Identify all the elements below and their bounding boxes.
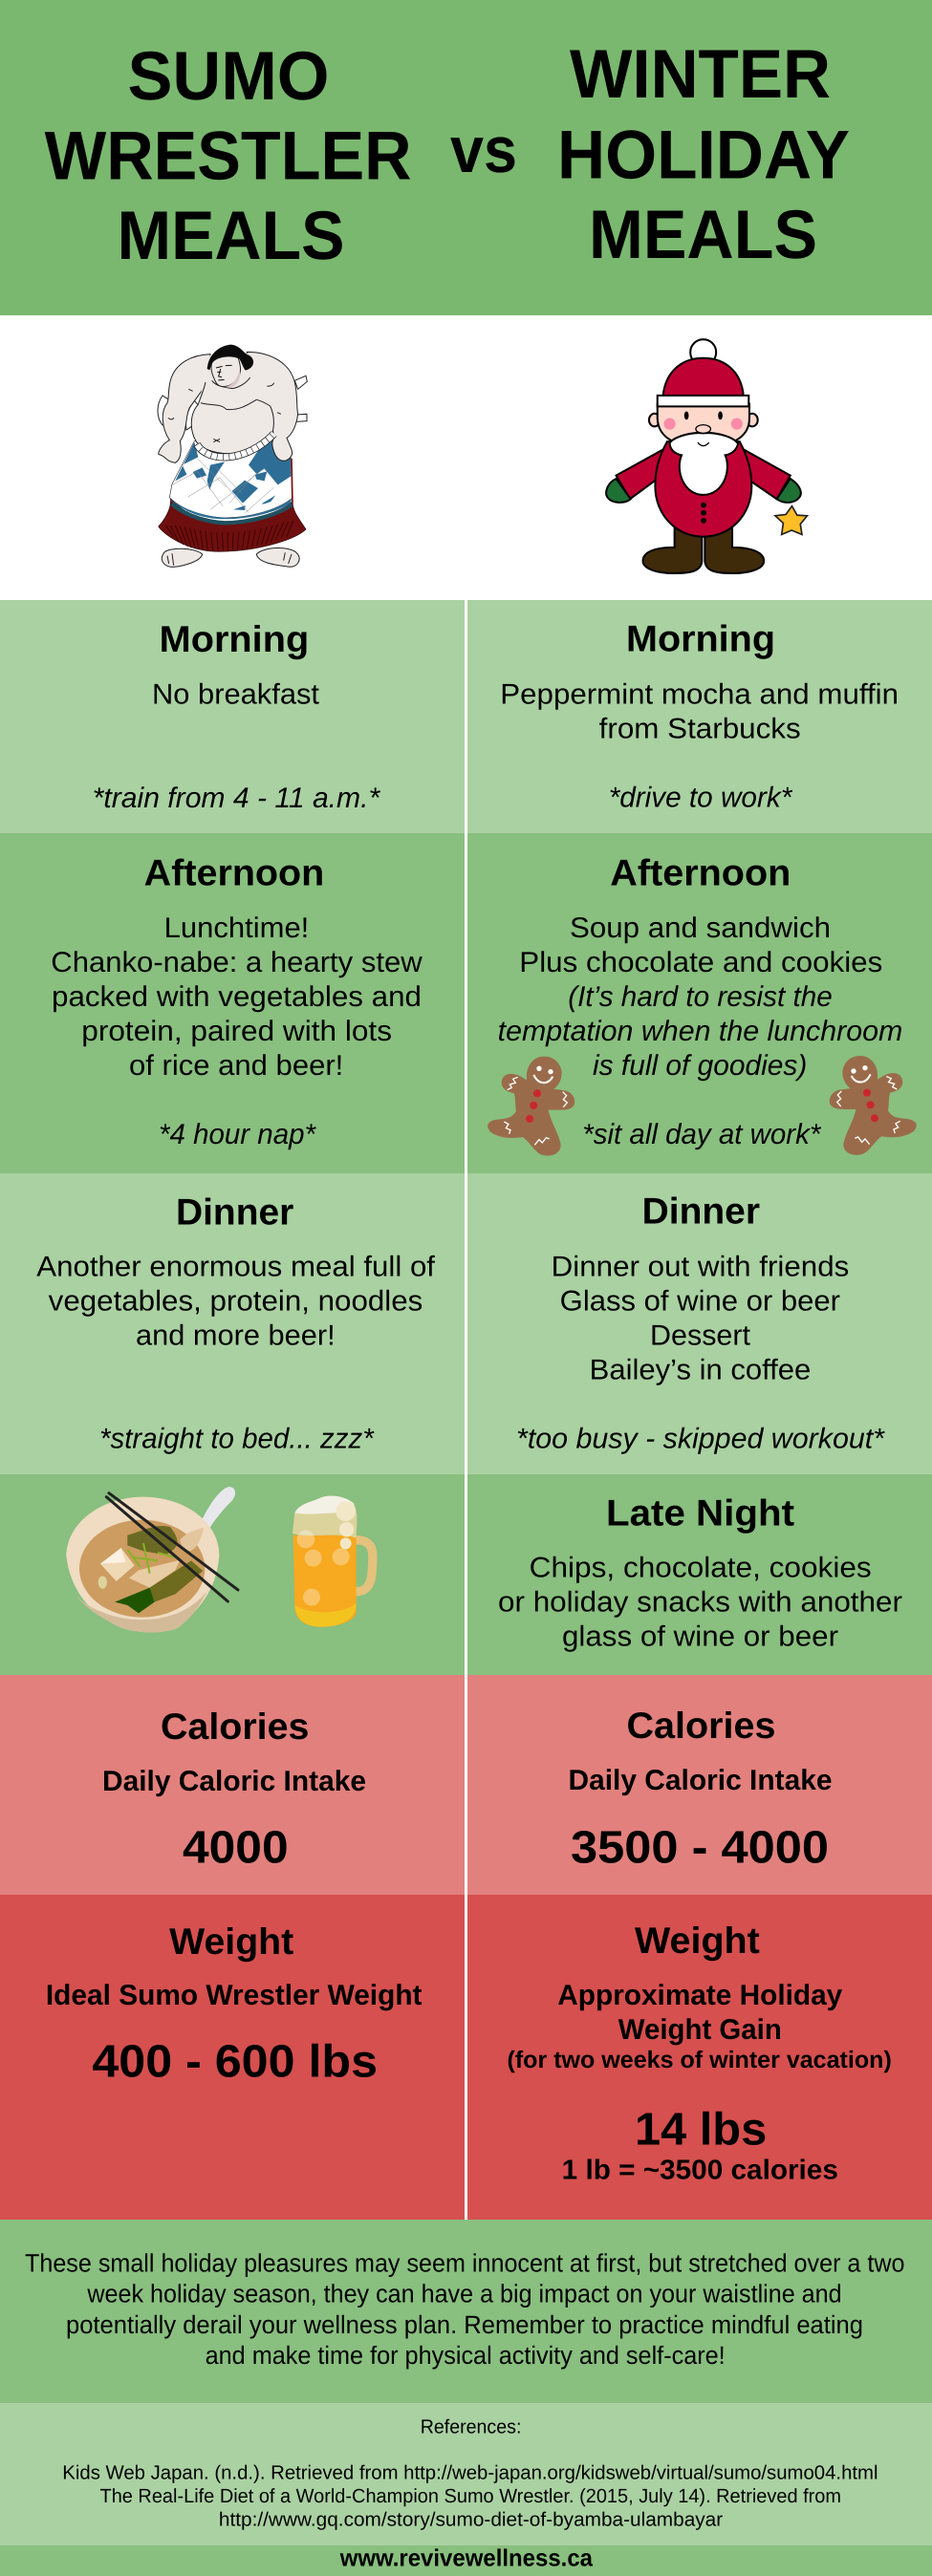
panel: dinner, holiday bbox=[467, 1173, 932, 1474]
note: sit all day: *sit all day at work* bbox=[582, 1119, 822, 1150]
title: sumo wrestler meals: MEALS bbox=[117, 198, 344, 274]
text: peppermint mocha bbox=[500, 678, 899, 744]
text: summary message: and make time for physical activity and self-care! bbox=[206, 2341, 726, 2370]
text: chips and snacks: or holiday snacks with another bbox=[498, 1586, 902, 1619]
icon part: head bbox=[658, 404, 749, 447]
panel: references bbox=[0, 2403, 932, 2545]
title: sumo wrestler meals: SUMO bbox=[128, 38, 329, 115]
note: nap: *4 hour nap* bbox=[159, 1119, 316, 1150]
icon part: foam bbox=[293, 1496, 357, 1537]
text: lunchtime: of rice and beer! bbox=[129, 1050, 343, 1082]
icon part: torso and belly bbox=[191, 354, 273, 454]
panel: calories, sumo bbox=[0, 1675, 465, 1895]
text: soup and sandwich: (It’s hard to resist the bbox=[568, 981, 833, 1013]
icon part: star bbox=[775, 506, 807, 534]
text: chips and snacks: glass of wine or beer bbox=[562, 1621, 838, 1653]
panel: late night, sumo illustrations bbox=[0, 1474, 465, 1675]
heading: morning: Morning bbox=[626, 618, 775, 659]
icon part: hat band bbox=[658, 396, 748, 406]
title: winter holiday meals: HOLIDAY bbox=[557, 117, 850, 193]
icon part: soup bbox=[79, 1520, 205, 1618]
icon: santa gnome bbox=[606, 339, 807, 573]
text: dinner out bbox=[552, 1251, 849, 1385]
title: sumo wrestler meals: WRESTLER bbox=[45, 118, 412, 195]
text: soup and sandwich bbox=[498, 912, 902, 1082]
icon part: ears bbox=[649, 414, 758, 426]
icon part: pompom bbox=[690, 339, 716, 365]
text: summary message: potentially derail your wellness plan. Remember to practice mindful eating bbox=[66, 2310, 863, 2339]
text: dinner out: Glass of wine or beer bbox=[560, 1285, 840, 1317]
note: drive: *drive to work* bbox=[609, 783, 793, 814]
note: too busy: *too busy - skipped workout* bbox=[516, 1423, 885, 1454]
icon part: handle bbox=[351, 1540, 373, 1592]
panel: afternoon, holiday bbox=[467, 833, 932, 1173]
number: 14 lbs: 14 lbs bbox=[635, 2104, 767, 2155]
text: chips and snacks bbox=[498, 1552, 902, 1653]
heading: dinner: Dinner bbox=[176, 1191, 293, 1233]
heading: afternoon: Afternoon bbox=[610, 853, 791, 894]
heading: afternoon: Afternoon bbox=[144, 853, 324, 894]
icon part: fringe strands bbox=[165, 521, 293, 551]
icon part: legs and boots bbox=[643, 526, 764, 573]
text: soup and sandwich: Soup and sandwich bbox=[570, 912, 831, 944]
label: approximate holiday weight gain: (for two weeks of winter vacation) bbox=[507, 2047, 892, 2073]
icon part: kimono apron bbox=[169, 438, 293, 519]
icon: gingerbread man right bbox=[831, 1057, 915, 1154]
icon part: spoon bbox=[180, 1487, 235, 1549]
text: lunchtime bbox=[51, 912, 423, 1082]
panel: late night, holiday bbox=[467, 1474, 932, 1675]
text: chips and snacks: Chips, chocolate, cookies bbox=[530, 1552, 872, 1584]
icon part: kelp wrap bbox=[150, 1560, 203, 1602]
icon part: hat bbox=[662, 358, 744, 397]
text: lunchtime: packed with vegetables and bbox=[52, 981, 422, 1013]
text: citations: The Real-Life Diet of a World-Champion Sumo Wrestler. (2015, July 14). Retrieved from bbox=[99, 2485, 841, 2507]
panel: calories, holiday bbox=[467, 1675, 932, 1895]
icon part: buttons bbox=[701, 503, 706, 524]
text: enormous meal: and more beer! bbox=[136, 1320, 336, 1351]
icon part: body bbox=[655, 441, 751, 537]
title: winter holiday meals bbox=[557, 36, 850, 273]
text: dinner out: Dessert bbox=[650, 1320, 751, 1351]
text: peppermint mocha: Peppermint mocha and muffin bbox=[500, 678, 899, 710]
note: 1 lb equals 3500 calories: 1 lb = ~3500 calories bbox=[562, 2155, 838, 2185]
icon part: bubbles bbox=[297, 1531, 350, 1606]
panel: morning, holiday bbox=[467, 600, 932, 833]
number: 3500 - 4000: 3500 - 4000 bbox=[571, 1823, 829, 1874]
icon part: head and hair bbox=[207, 345, 253, 388]
number: 400 - 600 lbs: 400 - 600 lbs bbox=[92, 2037, 378, 2088]
heading: weight: Weight bbox=[635, 1921, 760, 1962]
icon part: beer bbox=[293, 1535, 357, 1627]
label: approximate holiday weight gain: Weight Gain bbox=[618, 2014, 782, 2046]
title: vs: vs bbox=[450, 114, 517, 186]
icon: sumo wrestler bbox=[158, 345, 307, 567]
title: sumo wrestler meals bbox=[45, 38, 412, 274]
icon part: chopsticks bbox=[106, 1493, 238, 1601]
text: dinner out: Dinner out with friends bbox=[552, 1251, 849, 1282]
heading: dinner: Dinner bbox=[642, 1191, 760, 1232]
icon part: fringe skirt bbox=[159, 499, 306, 551]
text: summary message bbox=[25, 2248, 904, 2370]
panel: summary bbox=[0, 2220, 932, 2403]
icon part: seaweed bbox=[127, 1526, 177, 1555]
label: daily caloric intake: Daily Caloric Intake bbox=[568, 1765, 832, 1796]
panel: afternoon, sumo bbox=[0, 833, 465, 1173]
text: dinner out: Bailey’s in coffee bbox=[590, 1354, 811, 1385]
panel: dinner, sumo bbox=[0, 1173, 465, 1474]
text: enormous meal bbox=[36, 1251, 436, 1351]
icon part: chest details bbox=[168, 377, 281, 442]
icon part: feet bbox=[162, 547, 299, 567]
heading: weight: Weight bbox=[169, 1921, 293, 1963]
icon part: arms and shoulders bbox=[159, 352, 298, 462]
text: website: www.revivewellness.ca bbox=[339, 2545, 594, 2572]
text: citations: http://www.gq.com/story/sumo-diet-of-byamba-ulambayar bbox=[219, 2508, 723, 2530]
text: summary message: week holiday season, they can have a big impact on your waistline and bbox=[86, 2279, 842, 2308]
label: approximate holiday weight gain: Approximate Holiday bbox=[557, 1980, 843, 2011]
text: soup and sandwich: is full of goodies) bbox=[593, 1050, 807, 1082]
heading: references: References: bbox=[421, 2416, 521, 2438]
text: enormous meal: Another enormous meal full of bbox=[36, 1251, 436, 1282]
icon part: spoon in soup bbox=[180, 1527, 204, 1551]
text: summary message: These small holiday pleasures may seem innocent at first, but stretched over a two bbox=[25, 2248, 904, 2277]
icon part: scallions bbox=[127, 1543, 175, 1574]
label: ideal sumo wrestler weight: Ideal Sumo Wrestler Weight bbox=[46, 1980, 423, 2011]
panel: footer bbox=[0, 2545, 932, 2576]
text: soup and sandwich: temptation when the lunchroom bbox=[498, 1016, 902, 1047]
title: winter holiday meals: MEALS bbox=[589, 197, 817, 273]
label: approximate holiday weight gain bbox=[507, 1980, 892, 2073]
text: peppermint mocha: from Starbucks bbox=[599, 713, 801, 744]
heading: morning: Morning bbox=[160, 619, 309, 660]
icon part: eyes bbox=[684, 411, 723, 419]
text: enormous meal: vegetables, protein, noodles bbox=[49, 1285, 423, 1317]
icon: gingerbread man left bbox=[488, 1058, 574, 1154]
text: citations: Kids Web Japan. (n.d.). Retrieved from http://web-japan.org/kidsweb/virtual/sumo/sumo04.html bbox=[62, 2462, 878, 2484]
label: daily caloric intake: Daily Caloric Intake bbox=[102, 1766, 366, 1797]
icon part: arms bbox=[617, 450, 791, 499]
text: lunchtime: Lunchtime! bbox=[164, 912, 309, 944]
text: no breakfast: No breakfast bbox=[152, 679, 320, 711]
icon part: nose bbox=[696, 425, 710, 433]
icon part: tofu bbox=[100, 1548, 135, 1581]
icon: soup bowl with chopsticks bbox=[66, 1487, 238, 1632]
panel: morning, sumo bbox=[0, 600, 465, 833]
text: lunchtime: Chanko-nabe: a hearty stew bbox=[51, 947, 423, 978]
icon part: smile bbox=[698, 442, 709, 446]
note: train: *train from 4 - 11 a.m.* bbox=[93, 783, 381, 814]
icon part: apron band bbox=[171, 504, 292, 523]
text: citations bbox=[62, 2462, 878, 2530]
divider between columns bbox=[465, 600, 467, 2220]
number: 4000: 4000 bbox=[183, 1823, 289, 1874]
panel: title header bbox=[0, 0, 932, 315]
title: winter holiday meals: WINTER bbox=[570, 36, 831, 113]
text: soup and sandwich: Plus chocolate and cookies bbox=[519, 947, 882, 978]
heading: calories: Calories bbox=[627, 1706, 776, 1747]
icon part: rope ends bbox=[158, 376, 307, 430]
panel: weight, holiday bbox=[467, 1895, 932, 2220]
icon part: beard bbox=[670, 433, 738, 495]
text: lunchtime: protein, paired with lots bbox=[81, 1016, 392, 1047]
icon part: mittens bbox=[606, 479, 801, 503]
panel: weight, sumo bbox=[0, 1895, 465, 2220]
panel: illustrations bbox=[0, 315, 932, 600]
note: straight to bed: *straight to bed... zzz* bbox=[99, 1423, 375, 1454]
icon part: belt rope bbox=[197, 434, 274, 457]
icon: beer mug bbox=[293, 1496, 373, 1627]
icon part: bowl bbox=[66, 1497, 219, 1632]
heading: late night: Late Night bbox=[606, 1492, 794, 1535]
icon part: cheeks bbox=[663, 419, 743, 430]
heading: calories: Calories bbox=[161, 1707, 309, 1748]
